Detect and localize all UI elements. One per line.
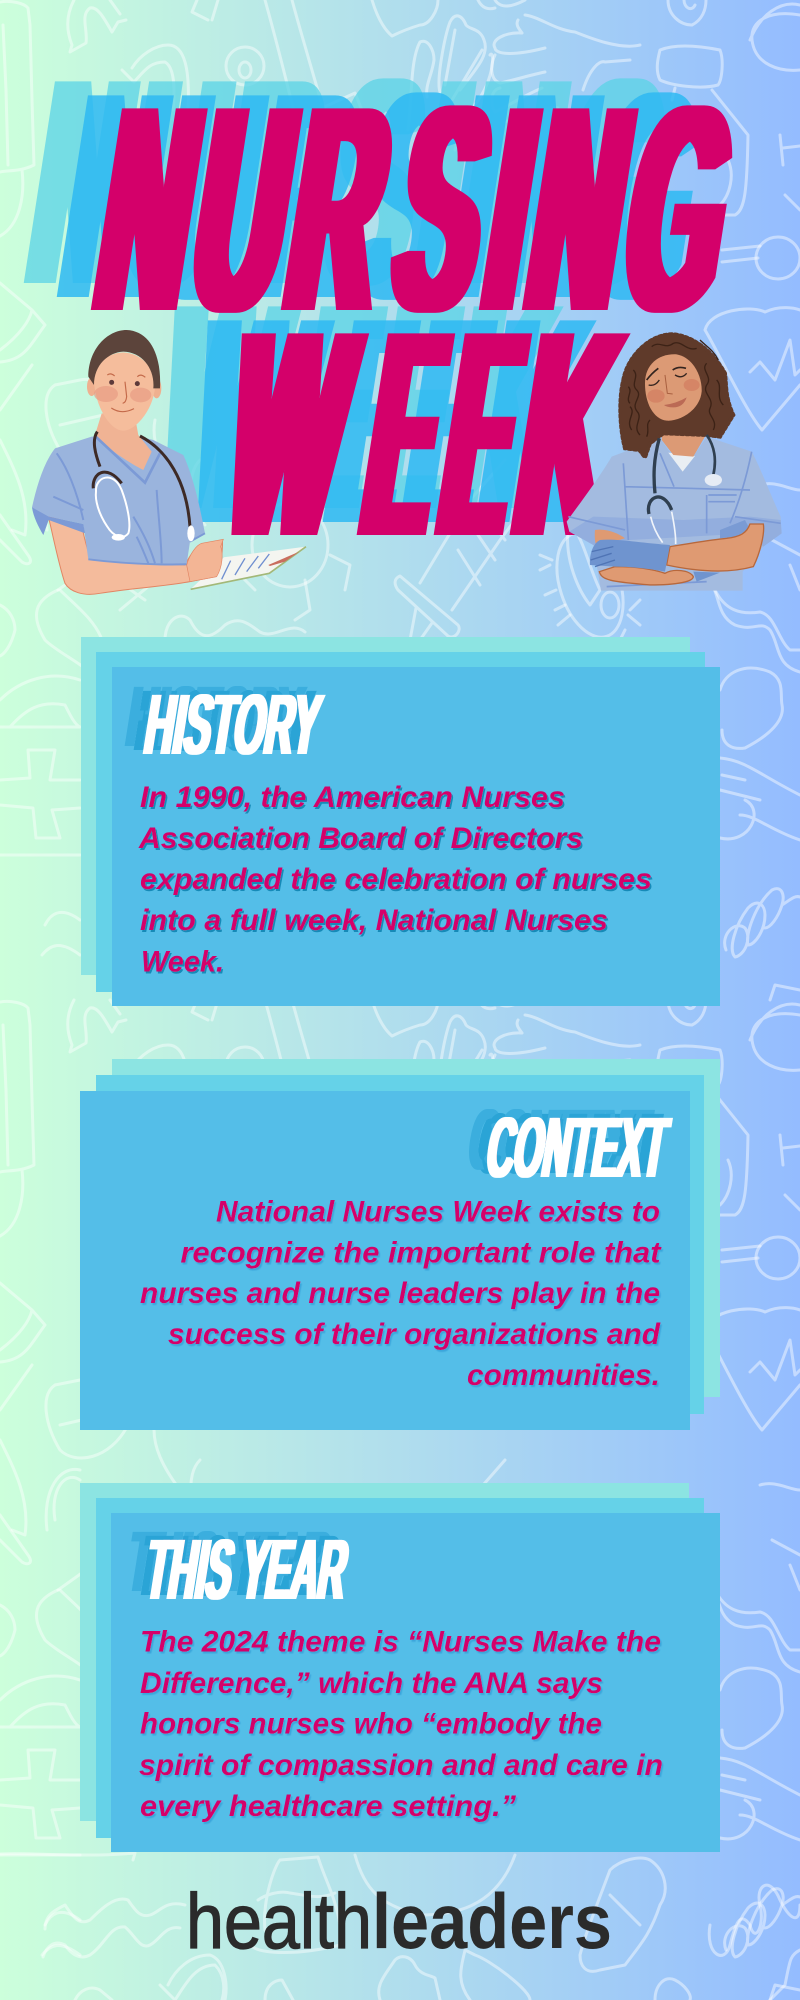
title main lettering [82, 45, 750, 598]
clipboard [191, 547, 306, 589]
body text [139, 1626, 663, 1823]
panel: this year: THIS YEAR [140, 1522, 354, 1618]
face [645, 354, 702, 421]
body text: honors nurses who “embody the [140, 1708, 602, 1740]
logo: healthleaders: leaders [372, 1877, 612, 1965]
title shadow layer far [15, 18, 683, 571]
title shadow layer near: EE [315, 257, 505, 585]
title shadow layer near [48, 32, 716, 585]
title shadow layer near: NURSING [48, 32, 716, 359]
panel: this year: THIS YEAR [131, 1518, 345, 1614]
body text: Association Board of Directors [138, 822, 583, 855]
arm [48, 517, 222, 594]
heading: Context [463, 1092, 674, 1196]
inner shirt [668, 453, 695, 472]
scrub top [567, 437, 782, 591]
stethoscope [93, 432, 195, 541]
panel: history [81, 637, 720, 1006]
title main lettering: EE [349, 270, 539, 598]
card stack back layers [81, 637, 720, 1006]
heading: History [121, 669, 327, 773]
heading: History: HISTORY [121, 669, 309, 765]
left arm [595, 530, 625, 547]
title shadow layer near: K [467, 257, 602, 584]
hand [187, 539, 223, 582]
card stack back layers [80, 1483, 720, 1852]
neck [95, 413, 152, 470]
title main lettering: W [209, 270, 371, 597]
card stack back layers [80, 1059, 720, 1430]
title main lettering: K [501, 270, 636, 597]
body text [138, 781, 652, 978]
logo: healthleaders [186, 1877, 612, 1965]
body text: spirit of compassion and and care in [139, 1749, 663, 1782]
heading: History: HISTORY [130, 673, 318, 769]
panel: history: HISTORY [139, 677, 327, 773]
stethoscope [648, 435, 722, 544]
heading: This Year [122, 1514, 354, 1618]
title shadow layer near: W [175, 257, 337, 584]
body text: success of their organizations and [168, 1318, 661, 1351]
hand glove upper [720, 520, 749, 538]
hand glove lower [693, 572, 720, 582]
body text: every healthcare setting.” [140, 1790, 516, 1823]
title: Nursing Week [15, 18, 750, 598]
body text: In 1990, the American Nurses [140, 781, 565, 814]
body text: nurses and nurse leaders play in the [140, 1277, 660, 1310]
upper arm [667, 524, 764, 571]
body text: National Nurses Week exists to [216, 1196, 660, 1228]
body text: Difference,” which the ANA says [140, 1667, 603, 1700]
title shadow layer far: W [142, 243, 304, 570]
glove [590, 540, 670, 572]
hair [620, 334, 733, 457]
lower arm [599, 567, 693, 585]
hair curls [628, 340, 723, 437]
neck [662, 413, 705, 457]
logo: healthleaders: health [186, 1877, 372, 1965]
title shadow layer far: K [434, 243, 569, 570]
scrub top [32, 437, 205, 564]
body text: into a full week, National Nurses [140, 904, 608, 937]
title shadow layer far: EE [282, 243, 472, 571]
panel: this year [80, 1483, 720, 1852]
body text: expanded the celebration of nurses [140, 863, 652, 896]
body text: Week. [141, 946, 224, 978]
illustration: nurse with clipboard [32, 330, 306, 594]
illustration: nurse with crossed arms [567, 334, 782, 591]
head and face [87, 330, 161, 431]
title shadow layer far: NURSING [15, 18, 683, 345]
panel: context [80, 1059, 720, 1430]
body text [140, 1196, 663, 1392]
panel: this year: THIS YEAR [122, 1514, 336, 1610]
body text: The 2024 theme is “Nurses Make the [140, 1626, 661, 1658]
title main lettering: NURSING [82, 45, 750, 372]
body text: recognize the important role that [180, 1236, 663, 1270]
body text: communities. [467, 1359, 660, 1392]
